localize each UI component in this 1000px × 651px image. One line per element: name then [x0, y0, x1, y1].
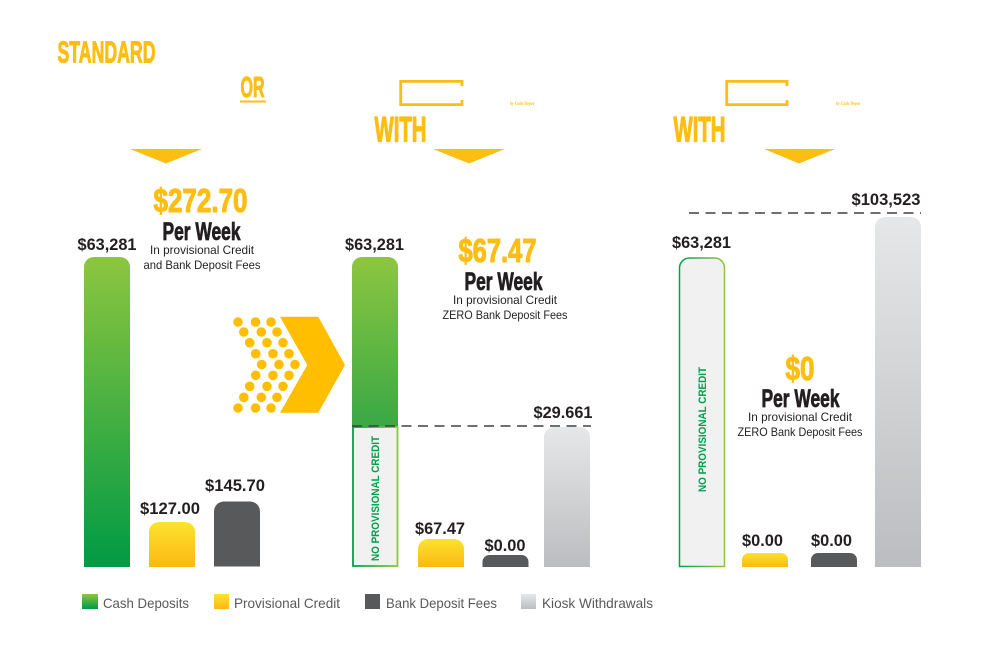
bar: kiosk withdrawals — [544, 427, 590, 567]
heading: with, middle: WITH — [374, 110, 426, 150]
value: kiosk withdrawals: $29.661 — [534, 403, 592, 422]
callout: left fees: Per Week — [162, 218, 241, 246]
value: bank deposit fees: $0.00 — [811, 531, 852, 550]
arrow: middle column — [433, 149, 505, 164]
value: kiosk withdrawals: $103,523 — [852, 190, 920, 209]
legend: provisional credit: Provisional Credit — [234, 595, 340, 611]
logo frame: right — [727, 81, 787, 105]
legend: bank deposit fees: Bank Deposit Fees — [386, 595, 497, 611]
bar: bank deposit fees — [811, 553, 857, 567]
chart: with kiosk, middle — [345, 235, 592, 567]
callout: middle fees: In provisional Credit — [453, 293, 558, 307]
heading: with, right: WITH — [674, 110, 726, 150]
legend: kiosk withdrawals: Kiosk Withdrawals — [542, 595, 653, 611]
logo tagline: middle: by Cash Depot — [510, 102, 534, 107]
callout: left fees — [144, 182, 260, 272]
callout: right fees: ZERO Bank Deposit Fees — [738, 425, 862, 439]
arrow: right column — [764, 149, 835, 164]
label: no provisional credit: NO PROVISIONAL CREDIT — [697, 367, 709, 492]
bar: bank deposit fees — [482, 555, 528, 567]
legend: cash deposits: Cash Deposits — [103, 595, 189, 611]
value: bank deposit fees: $0.00 — [484, 536, 526, 555]
label: no provisional credit: NO PROVISIONAL CREDIT — [370, 436, 382, 561]
bar: provisional credit — [149, 522, 195, 567]
value: cash deposits: $63,281 — [78, 235, 136, 254]
heading: standard: STANDARD — [58, 34, 156, 70]
bar: no provisional credit — [680, 258, 724, 566]
bar: cash deposits — [352, 257, 398, 427]
bar: no provisional credit — [353, 427, 398, 566]
callout: left fees: In provisional Credit — [150, 243, 255, 257]
legend — [82, 594, 653, 611]
callout: middle fees — [442, 232, 568, 322]
callout: middle fees: ZERO Bank Deposit Fees — [442, 308, 568, 322]
value: provisional credit: $67.47 — [415, 519, 465, 538]
bar: bank deposit fees — [214, 502, 260, 566]
callout: middle fees: Per Week — [464, 268, 543, 296]
bar: cash deposits — [84, 257, 130, 567]
icon: dotted chevron arrow — [233, 317, 345, 413]
heading: or — [240, 72, 266, 104]
bar: provisional credit — [418, 539, 464, 567]
logo tagline: right: by Cash Depot — [836, 102, 860, 107]
logo frame: middle — [401, 81, 462, 105]
value: provisional credit: $127.00 — [140, 499, 200, 518]
callout: right fees: Per Week — [762, 385, 840, 413]
chart: with kiosk, right — [672, 190, 921, 567]
callout: right fees: $0 — [786, 350, 814, 387]
heading: or: OR — [240, 72, 265, 104]
callout: right fees: In provisional Credit — [748, 410, 853, 424]
callout: left fees: and Bank Deposit Fees — [144, 258, 260, 272]
callout: middle fees: $67.47 — [458, 232, 536, 269]
value: cash deposits: $63,281 — [672, 233, 731, 252]
value: provisional credit: $0.00 — [742, 531, 783, 550]
chart: standard — [78, 235, 265, 567]
callout: left fees: $272.70 — [154, 182, 248, 219]
arrow: left column — [130, 149, 202, 164]
bar: kiosk withdrawals — [875, 217, 921, 567]
bar: provisional credit — [742, 553, 788, 567]
value: bank deposit fees: $145.70 — [205, 476, 265, 495]
callout: right fees — [738, 350, 862, 439]
value: cash deposits: $63,281 — [345, 235, 404, 254]
